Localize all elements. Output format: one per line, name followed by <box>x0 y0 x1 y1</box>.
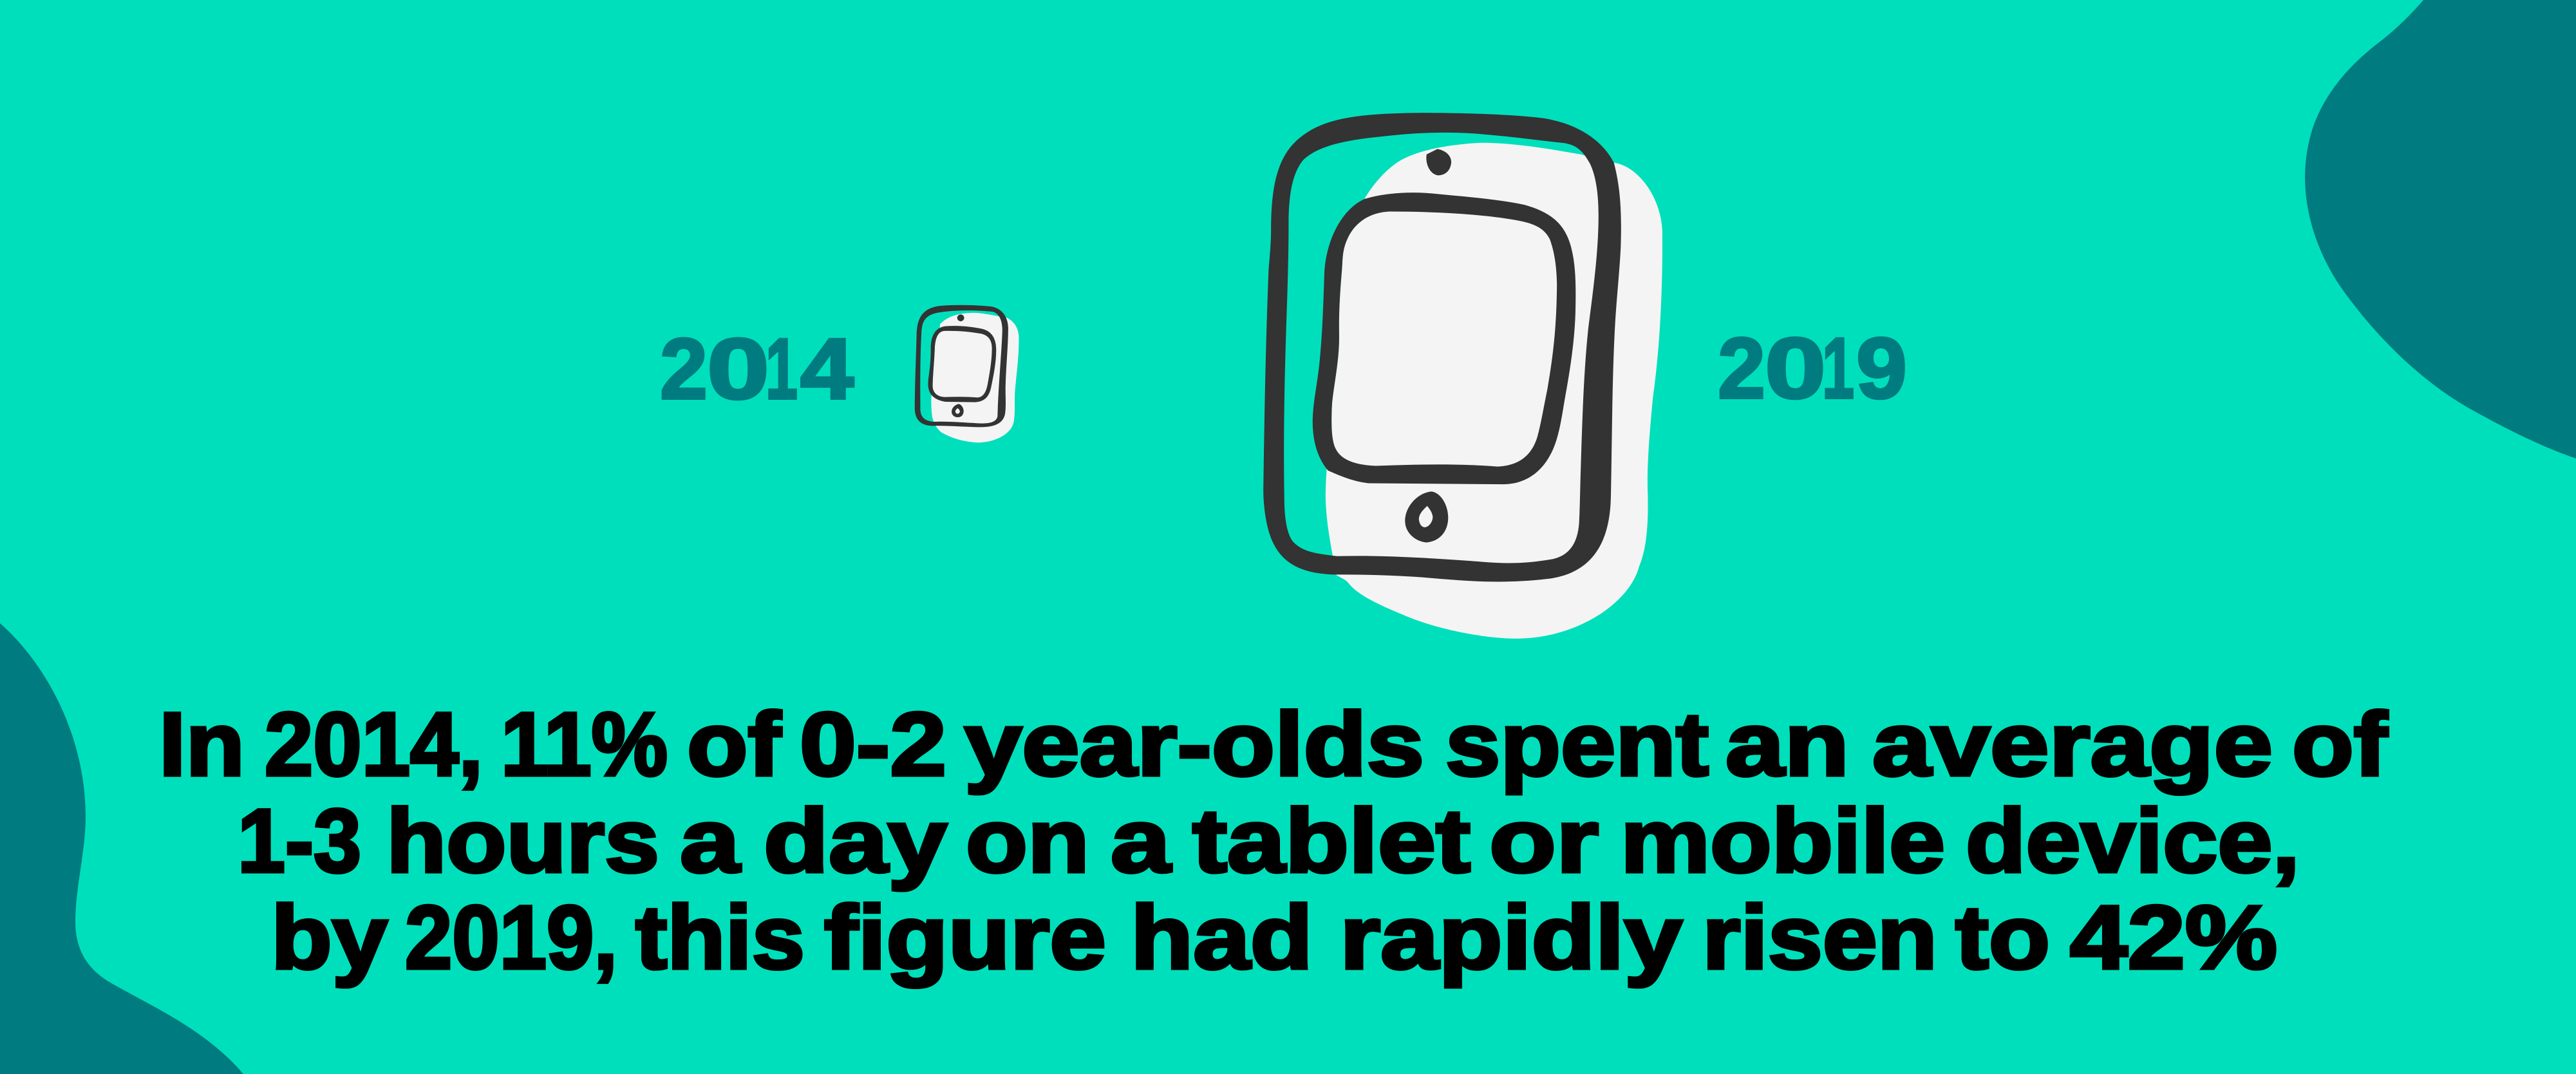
headline line 2: a <box>1111 790 1171 891</box>
headline line 3: to <box>1955 887 2050 988</box>
year label: 2019: 1 <box>1822 321 1854 417</box>
small tablet backing blob <box>931 313 1019 442</box>
icon: small tablet 2014 <box>915 305 1019 442</box>
year label: 2014: 2 <box>660 321 708 417</box>
headline line 3: this <box>635 887 805 988</box>
headline line 3: risen <box>1702 887 1937 988</box>
large tablet body outline <box>1263 113 1621 581</box>
year label: 2014 <box>660 321 854 417</box>
headline line 3 <box>271 887 2277 988</box>
small tablet screen outline <box>928 326 996 402</box>
headline line 1: of <box>687 693 781 795</box>
headline line 2: mobile <box>1621 790 1945 891</box>
headline line 2: day <box>764 790 947 891</box>
headline line 2: hours <box>386 790 659 891</box>
year label: 2019: 2 <box>1718 321 1765 417</box>
year label: 2019: 0 <box>1765 321 1826 417</box>
icon: large tablet 2019 <box>1263 113 1662 639</box>
headline statement <box>159 693 2387 988</box>
year label: 2014: 0 <box>707 321 769 417</box>
headline line 1: year-olds <box>964 693 1424 795</box>
year label: 2019: 9 <box>1856 321 1907 417</box>
headline line 2: a <box>680 790 740 891</box>
large tablet screen outline <box>1313 193 1575 484</box>
headline line 3: figure <box>824 887 1106 988</box>
small tablet screen fill <box>933 331 992 397</box>
small tablet camera dot <box>957 314 964 321</box>
decorative blob: bottom left corner <box>0 623 243 1074</box>
headline line 3: 2019, <box>405 887 617 988</box>
headline line 1: 0-2 <box>800 693 946 795</box>
headline line 3: had <box>1131 887 1313 988</box>
decorative blob: top right corner <box>2305 0 2576 458</box>
headline line 1: 2014, <box>265 693 483 795</box>
year label: 2019 <box>1718 321 1907 417</box>
headline line 2: on <box>966 790 1089 891</box>
headline line 1: average <box>1872 693 2273 795</box>
headline line 1: 11% <box>501 693 668 795</box>
headline line 1: spent <box>1445 693 1709 795</box>
headline line 1: In <box>159 693 245 795</box>
large tablet screen fill <box>1331 211 1557 467</box>
large tablet backing blob <box>1326 143 1662 639</box>
small tablet body outline <box>915 305 1008 427</box>
headline line 2 <box>238 790 2300 891</box>
headline line 3: 42% <box>2070 887 2277 988</box>
year label: 2014: 4 <box>800 321 854 417</box>
headline line 2: 1-3 <box>238 790 361 891</box>
small tablet home button <box>952 404 964 417</box>
headline line 3: by <box>271 887 388 988</box>
headline line 1 <box>159 693 2387 795</box>
large tablet camera dot <box>1426 149 1451 175</box>
headline line 2: device, <box>1966 790 2300 891</box>
headline line 2: tablet <box>1192 790 1471 891</box>
headline line 1: an <box>1725 693 1849 795</box>
headline line 3: rapidly <box>1340 887 1682 988</box>
year label: 2014: 1 <box>766 321 798 417</box>
headline line 1: of <box>2292 693 2387 795</box>
headline line 2: or <box>1489 790 1599 891</box>
large tablet home button <box>1405 491 1448 542</box>
